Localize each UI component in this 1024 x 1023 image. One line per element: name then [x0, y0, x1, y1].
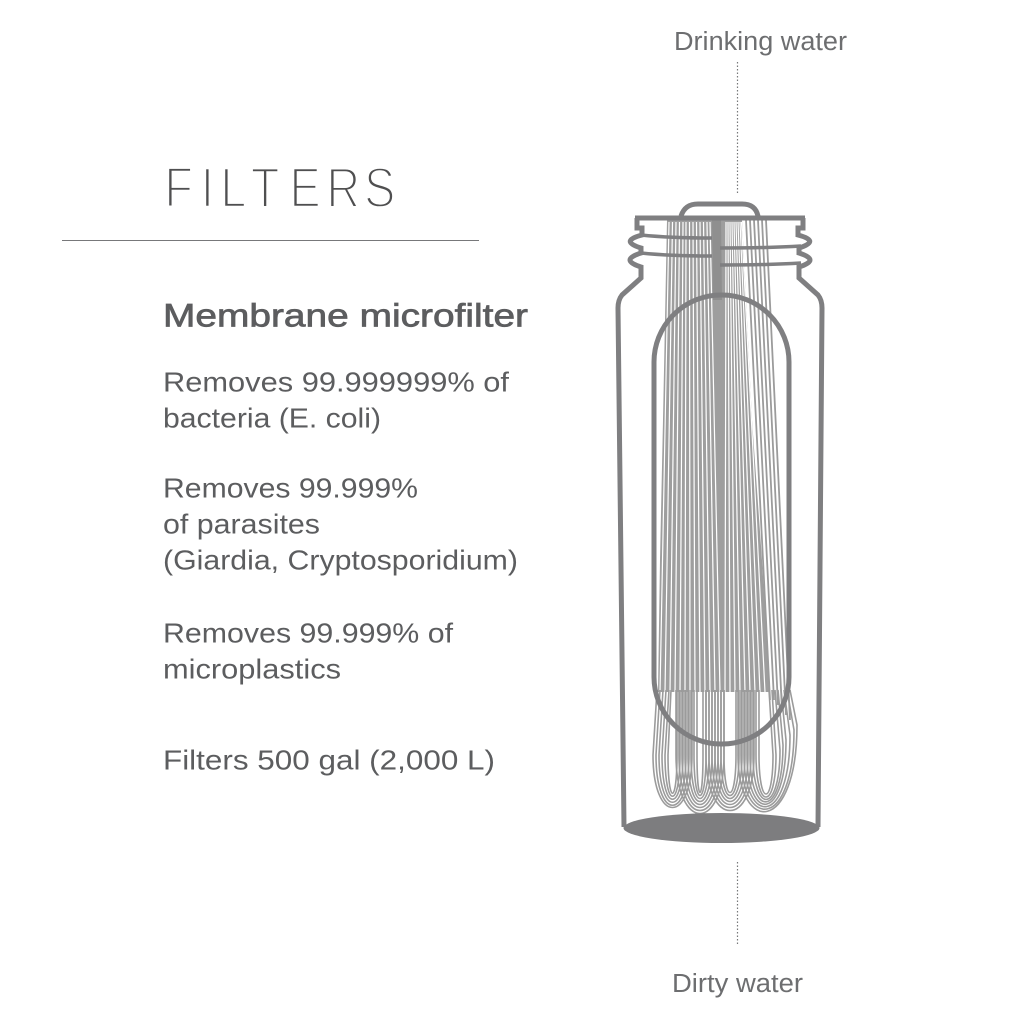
fibre loops	[653, 690, 797, 814]
bottle outline	[618, 218, 822, 827]
text: bacteria removal: bacteria (E. coli)	[163, 402, 381, 434]
arrow: dotted line to drinking water	[736, 62, 738, 195]
text: microplastics removal	[163, 618, 453, 684]
text: parasite removal: of parasites	[163, 508, 320, 540]
label: drinking water: Drinking water	[674, 28, 848, 56]
text: microplastics removal: Removes 99.999% of	[163, 618, 453, 648]
text block: filter specifications	[163, 298, 528, 776]
title: FILTERS	[164, 157, 395, 220]
heading: membrane microfilter: Membrane microfilter	[163, 298, 528, 334]
inner capsule	[654, 295, 789, 744]
fibre mass	[658, 220, 770, 692]
arrow: dotted line from dirty water	[736, 862, 738, 945]
label: dirty water: Dirty water	[672, 970, 804, 998]
illustration: filter bottle	[618, 204, 822, 843]
text: parasite removal: (Giardia, Cryptosporidium)	[163, 544, 518, 576]
bottle base	[624, 813, 820, 843]
right-hand loose fibres	[746, 220, 790, 720]
central fibre band	[712, 218, 722, 300]
text: bacteria removal	[163, 366, 509, 434]
thread lines	[641, 235, 801, 265]
text: filter capacity: Filters 500 gal (2,000 L)	[163, 744, 495, 776]
text: microplastics removal: microplastics	[163, 654, 341, 684]
fibre gaps	[660, 222, 765, 692]
text: bacteria removal: Removes 99.999999% of	[163, 366, 509, 398]
text: parasite removal	[163, 472, 518, 576]
text: parasite removal: Removes 99.999%	[163, 472, 418, 504]
bottle cap dome	[681, 204, 758, 216]
